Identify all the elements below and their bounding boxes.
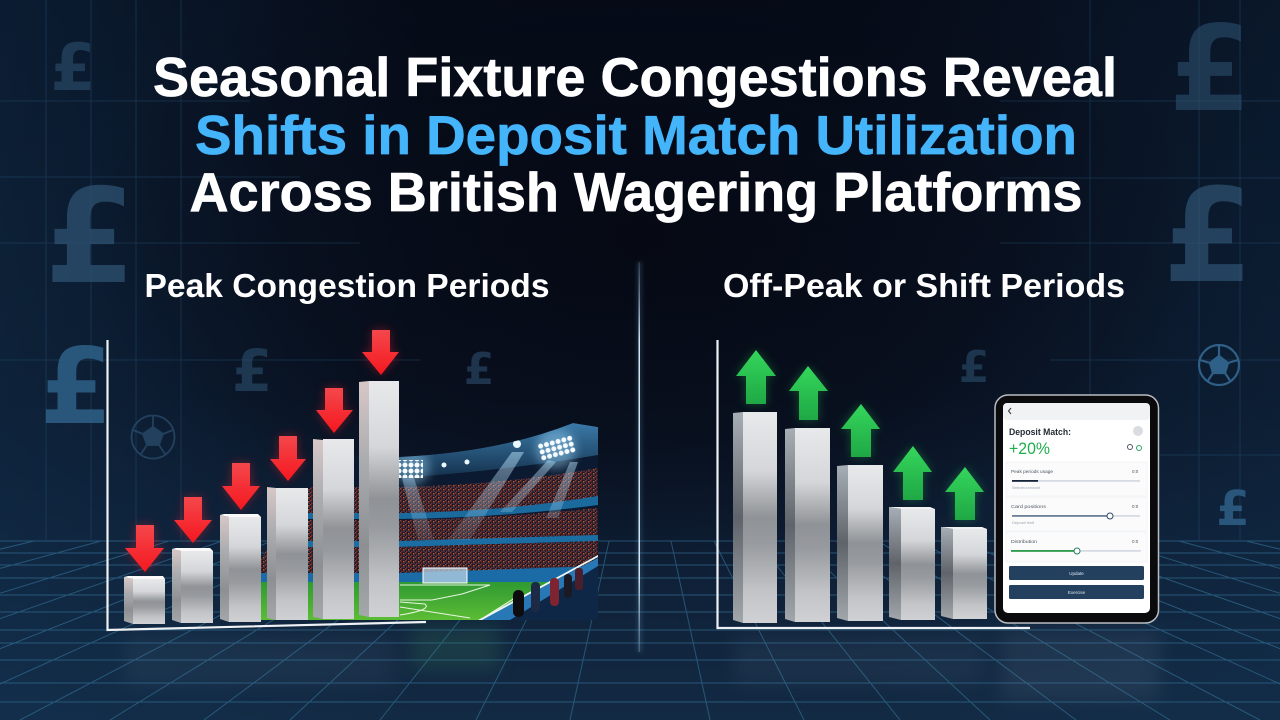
red arrow 2 — [174, 497, 212, 543]
icon: pound top left: £ — [50, 31, 96, 106]
floor reflections — [125, 625, 1160, 700]
button 1 — [1009, 566, 1144, 580]
arrow glows — [736, 350, 984, 520]
heading: off-peak: Off-Peak or Shift Periods — [723, 267, 1125, 304]
green arrow 3 — [841, 404, 880, 457]
bar 5 — [313, 439, 354, 619]
icon: football right — [1199, 345, 1239, 385]
stadium roof — [399, 423, 598, 478]
light beams — [402, 452, 578, 540]
slider row 2 — [1006, 497, 1147, 531]
slider row 1: Selected amount — [1012, 486, 1041, 490]
percent value: +20% — [1009, 439, 1050, 458]
title — [153, 46, 1117, 223]
icon: pound lower right: £ — [1216, 481, 1250, 537]
slider row 2: Deposit limit — [1012, 521, 1035, 525]
spectators — [513, 568, 583, 617]
slider row 3 — [1006, 532, 1147, 562]
slider row 2: 0:0 — [1132, 504, 1139, 509]
floor grid — [0, 541, 1280, 720]
bar 1 — [124, 576, 165, 624]
bar 2 — [785, 428, 830, 622]
stadium illustration — [260, 420, 600, 620]
status badge — [1133, 426, 1143, 436]
bar 1 — [733, 412, 777, 623]
icon: football left — [132, 416, 174, 458]
slider row 1: 0:0 — [1132, 469, 1139, 474]
green arrow 4 — [893, 446, 932, 500]
tablet screen — [1003, 403, 1150, 613]
axes — [718, 340, 1030, 628]
pound symbols and footballs — [39, 1, 1253, 537]
back chevron — [1008, 408, 1011, 414]
green arrow 2 — [789, 366, 828, 420]
pitch lines — [400, 585, 518, 620]
status dots — [1128, 444, 1142, 450]
icon: pound mid left: £ — [232, 337, 272, 405]
divider — [637, 262, 642, 652]
chart: off-peak bars with green arrows — [718, 340, 1030, 628]
stand corner — [510, 558, 598, 620]
green arrow 5 — [945, 467, 984, 520]
button 2 — [1009, 585, 1144, 599]
icon: pound large right: £ — [1163, 160, 1253, 312]
bar 3 — [837, 465, 883, 621]
bar 4 — [267, 487, 308, 620]
slider row 1: Peak periods usage — [1011, 469, 1054, 474]
icon: pound lower left: £ — [39, 326, 113, 448]
title line 2: Shifts in Deposit Match Utilization — [195, 104, 1077, 166]
button 2: Exercise — [1068, 590, 1086, 595]
crowd tiers — [260, 468, 598, 582]
icon: pound large left: £ — [44, 160, 136, 313]
bar 5 — [941, 527, 987, 619]
bar 2 — [172, 548, 213, 623]
chart: peak congestion bars with red arrows — [108, 330, 426, 630]
slider row 1 — [1006, 462, 1147, 496]
red arrow 6 — [362, 330, 399, 375]
heading: peak: Peak Congestion Periods — [144, 267, 550, 304]
screen heading: Deposit Match: — [1009, 427, 1071, 438]
title line 1: Seasonal Fixture Congestions Reveal — [153, 46, 1117, 108]
slider row 3: 0:0 — [1132, 539, 1139, 544]
red arrow 5 — [316, 388, 353, 433]
icon: pound centre: £ — [464, 344, 494, 395]
pitch — [261, 582, 550, 620]
arrow glows — [125, 330, 399, 572]
floodlights — [394, 429, 576, 485]
red arrow 4 — [270, 436, 306, 481]
icon: pound top right: £ — [1169, 1, 1251, 139]
icon: pound beside tablet: £ — [959, 342, 989, 393]
red arrow 3 — [222, 463, 260, 510]
axes — [108, 340, 426, 630]
slider row 3: Distribution — [1011, 539, 1038, 544]
bar 3 — [220, 514, 261, 622]
tablet body — [995, 395, 1158, 623]
goal — [423, 568, 467, 583]
tablet with deposit match screen — [995, 395, 1158, 623]
bar 6 — [359, 381, 399, 617]
slider row 2: Card positions — [1011, 504, 1047, 509]
title line 3: Across British Wagering Platforms — [190, 161, 1082, 223]
red arrow 1 — [125, 525, 164, 572]
button 1: Update — [1069, 571, 1084, 576]
green arrow 1 — [736, 350, 776, 404]
bar 4 — [889, 507, 935, 620]
